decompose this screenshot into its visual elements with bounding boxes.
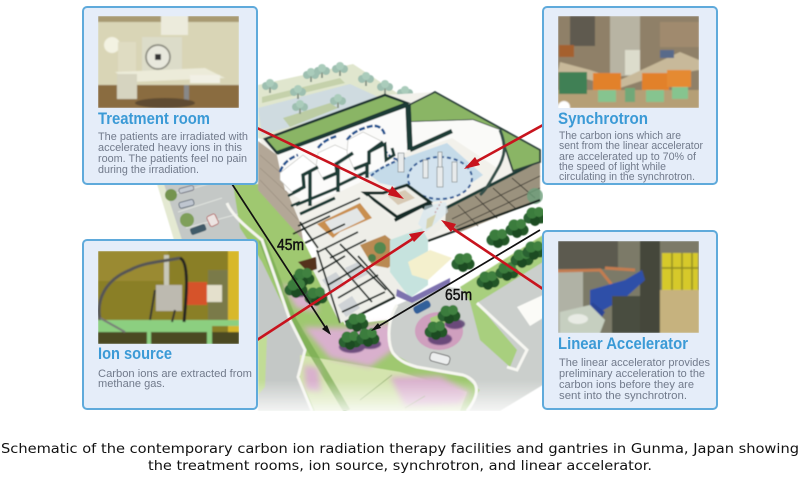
heading: Treatment room <box>98 109 210 128</box>
site illustration <box>157 62 546 411</box>
right wing rooms <box>422 160 543 243</box>
description: The linear accelerator provides <box>559 357 710 369</box>
gantry rooms <box>277 105 407 214</box>
caption <box>1 442 799 474</box>
dimension line: 45m: 45m <box>277 237 304 254</box>
heading: Ion source <box>98 344 172 363</box>
caption: Schematic of the contemporary carbon ion radiation therapy facilities and gantries in Gunma, Japan showing <box>1 442 799 457</box>
caption: the treatment rooms, ion source, synchrotron, and linear accelerator. <box>148 459 652 474</box>
bottom fade <box>258 380 543 411</box>
description: circulating in the synchrotron. <box>559 171 695 183</box>
description: during the irradiation. <box>98 164 199 176</box>
panel: treatment room <box>83 7 257 184</box>
building floor and retaining wall <box>258 92 514 318</box>
heading: Linear Accelerator <box>558 334 688 353</box>
green roof right <box>409 92 540 171</box>
treatment room block <box>365 185 432 221</box>
description: are accelerated up to 70% of <box>559 151 697 163</box>
description: the speed of light while <box>559 161 666 173</box>
panel: ion source <box>83 240 257 409</box>
description: preliminary acceleration to the <box>559 368 705 380</box>
description <box>98 368 252 390</box>
arrow: linear accelerator <box>441 220 543 289</box>
wall behind gantries <box>277 106 409 205</box>
description: Carbon ions are extracted from <box>98 368 252 380</box>
description: methane gas. <box>98 378 165 390</box>
dimension line: 65m: 65m <box>445 287 472 304</box>
arrow: synchrotron <box>464 125 543 169</box>
trees <box>284 207 546 353</box>
description: carbon ions before they are <box>559 379 694 391</box>
dimension line: 45m <box>232 184 331 335</box>
ground: roundabout and right roads <box>388 235 543 411</box>
rear garden <box>258 62 413 140</box>
description: sent from the linear accelerator <box>559 140 703 152</box>
photo: ion source <box>98 251 239 344</box>
green roof left <box>265 95 407 153</box>
ground: left parking and road <box>157 182 312 411</box>
photo: linear accelerator <box>558 241 699 333</box>
description: The patients are irradiated with <box>98 131 248 143</box>
office floors <box>293 196 452 323</box>
description: The carbon ions which are <box>559 130 681 142</box>
arrow: ion source <box>257 231 425 340</box>
description: room. The patients feel no pain <box>98 153 247 165</box>
ground: green belt with pink planting <box>227 184 480 411</box>
description: sent into the synchrotron. <box>559 390 687 402</box>
arrow: treatment room <box>257 128 404 199</box>
heading: Synchrotron <box>558 109 648 128</box>
photo: treatment room <box>98 16 239 108</box>
description <box>559 130 703 183</box>
synchrotron hall <box>368 104 505 202</box>
dimension line: 65m <box>371 230 540 331</box>
description: accelerated heavy ions in this <box>98 142 242 154</box>
panel: linear accelerator <box>543 231 717 409</box>
panel: synchrotron <box>543 7 717 184</box>
photo: synchrotron <box>558 16 699 113</box>
description <box>559 357 710 402</box>
description <box>98 131 248 176</box>
